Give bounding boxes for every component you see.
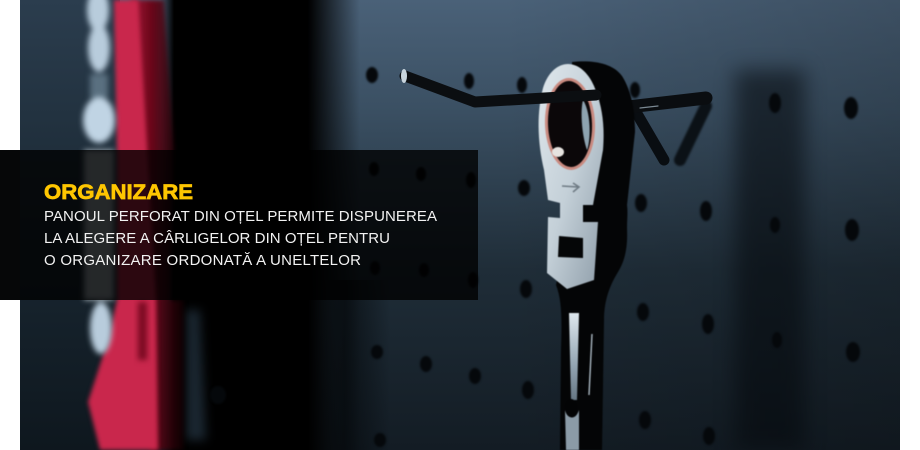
dark slit in red tool (138, 302, 147, 360)
lower grey patch beside red tool (186, 310, 206, 440)
wrench back side and shank (556, 61, 635, 450)
shank silver strip (569, 313, 579, 400)
engraved arrow (562, 183, 579, 192)
blurred red tool (88, 0, 158, 450)
body text: LA ALEGERE A CÂRLIGELOR DIN OȚEL PENTRU (44, 230, 390, 247)
ratchet wrench (539, 61, 635, 450)
body text (44, 208, 437, 269)
pegboard holes (210, 67, 860, 447)
wrench head silver face (539, 64, 604, 289)
steel hook: rear section and V brace (628, 98, 706, 160)
fork opening (558, 236, 583, 258)
lower shadow extension (337, 300, 376, 450)
heading: ORGANIZARE (44, 181, 193, 204)
shank hole with lower strip (565, 410, 579, 450)
blurred black shadow band (160, 0, 360, 450)
wall shadow right of the wrench (735, 70, 805, 450)
body text: O ORGANIZARE ORDONATĂ A UNELTELOR (44, 252, 361, 269)
blurred dark red edge (130, 0, 184, 450)
text panel background (0, 150, 478, 300)
ratchet ring (543, 77, 597, 171)
blurred left wall (20, 0, 120, 336)
ring interior highlight (582, 100, 590, 150)
shank edge highlight (589, 334, 592, 395)
steel hook: front section through the ring (401, 69, 596, 102)
blurred silver tool parts (83, 0, 115, 354)
body text: PANOUL PERFORAT DIN OȚEL PERMITE DISPUNEREA (44, 208, 437, 225)
